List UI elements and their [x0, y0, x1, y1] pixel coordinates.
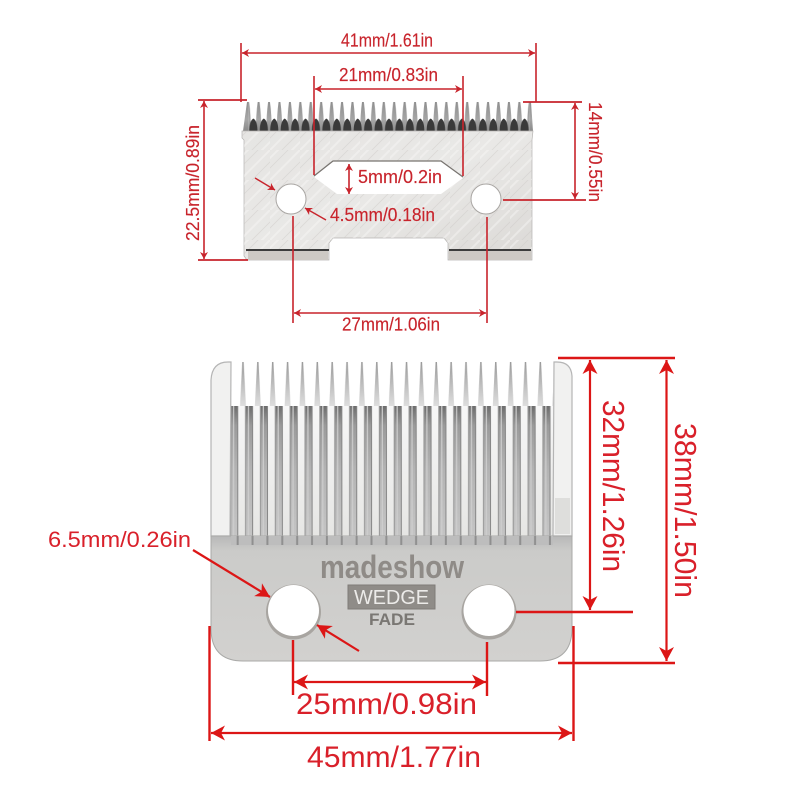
dimension: 5mm window height: 5mm/0.2in — [358, 167, 442, 187]
dimension: 25mm hole spacing: 25mm/0.98in — [296, 688, 477, 721]
comb right solid edge — [553, 362, 572, 536]
dimension: 45mm width — [210, 626, 574, 774]
dimension: 45mm width: 45mm/1.77in — [307, 741, 481, 774]
dimension: 22.5mm height: 22.5mm/0.89in — [183, 125, 203, 241]
dimension: 27mm hole spacing — [293, 216, 487, 334]
cutter teeth — [243, 102, 533, 132]
comb blade left hole — [266, 584, 321, 640]
dimension: 5mm window height — [349, 164, 442, 194]
dimension: 41mm width: 41mm/1.61in — [341, 30, 433, 50]
dimension: 21mm window width — [314, 65, 463, 176]
cutter blade left hole — [276, 184, 306, 214]
dimension: 32mm height — [516, 358, 675, 612]
dimension: 41mm width — [241, 30, 536, 102]
dimension: 14mm height — [503, 102, 605, 202]
cutter blade right hole — [471, 184, 501, 214]
dimension: 21mm window width: 21mm/0.83in — [339, 65, 438, 85]
panel: upper cutter blade — [242, 102, 533, 260]
dimension: 25mm hole spacing — [293, 640, 487, 721]
cutter blade body — [242, 131, 533, 260]
dimension: 4.5mm hole diameter: 4.5mm/0.18in — [330, 205, 435, 225]
panel: lower comb blade — [211, 360, 572, 661]
comb teeth roots — [231, 536, 553, 545]
comb left solid edge — [211, 362, 231, 536]
dimension: 27mm hole spacing: 27mm/1.06in — [342, 314, 440, 334]
badge WEDGE: WEDGE — [354, 587, 429, 609]
brand text madeshow: madeshow — [320, 549, 464, 585]
dimension: 6.5mm hole diameter: 6.5mm/0.26in — [48, 527, 191, 552]
cutter blade centre window — [314, 161, 463, 194]
dimension: 38mm height: 38mm/1.50in — [668, 423, 703, 598]
dimension: 22.5mm height — [183, 100, 248, 260]
dimension: 6.5mm hole diameter — [48, 527, 359, 651]
comb teeth — [230, 360, 553, 545]
label FADE: FADE — [369, 611, 415, 629]
dimension: 32mm height: 32mm/1.26in — [596, 400, 631, 572]
comb blade body — [211, 536, 572, 661]
dimension: 4.5mm hole diameter — [255, 178, 435, 225]
comb blade right hole — [462, 584, 516, 640]
dimension: 14mm height: 14mm/0.55in — [585, 102, 605, 202]
